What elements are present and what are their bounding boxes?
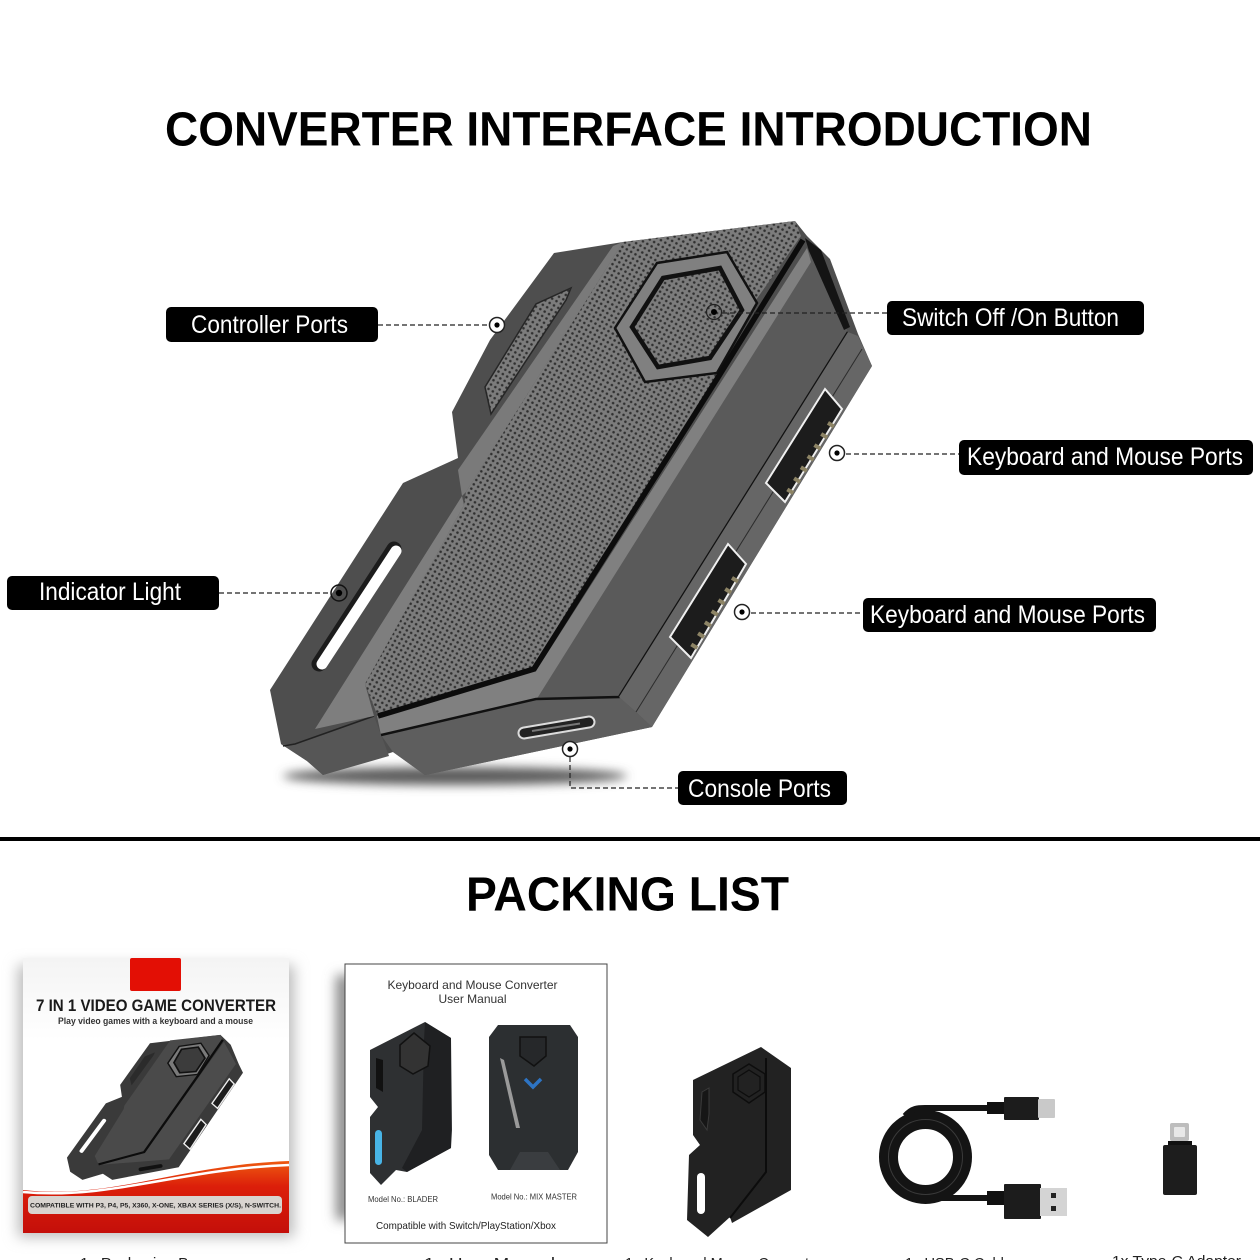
callout: console ports: Console Ports <box>688 775 831 803</box>
callout: keyboard and mouse ports lower <box>734 598 1156 632</box>
device ground shadow <box>283 767 627 785</box>
tab lower facet <box>281 716 389 775</box>
item: type-c adapter <box>1163 1123 1197 1195</box>
usb-a plug <box>987 1184 1067 1219</box>
manual page <box>345 964 607 1243</box>
callout: keyboard and mouse ports upper <box>830 440 1253 475</box>
box title: 7 IN 1 VIDEO GAME CONVERTER <box>36 997 276 1015</box>
model labels: Model No.: BLADER <box>368 1195 438 1204</box>
manual shadow <box>336 975 352 1220</box>
cable coil <box>888 1120 962 1194</box>
callout: indicator light: Indicator Light <box>39 578 181 606</box>
item: keyboard and mouse converter <box>687 1047 791 1237</box>
manual title: Keyboard and Mouse Converter <box>387 978 558 992</box>
callout: indicator light <box>7 576 347 610</box>
tab light band <box>315 496 464 729</box>
usb-c plug <box>987 1097 1055 1120</box>
callout: keyboard and mouse ports lower: Keyboard and Mouse Ports <box>870 601 1145 629</box>
indicator light slot <box>319 549 396 664</box>
box front <box>23 958 289 1233</box>
box shadow <box>18 965 294 1237</box>
compatibility note: Compatible with Switch/PlayStation/Xbox <box>376 1220 557 1232</box>
box subtitle: Play video games with a keyboard and a mouse <box>58 1016 253 1027</box>
callout: console ports <box>562 742 847 805</box>
compatibility strip: COMPATIBLE WITH P3, P4, P5, X360, X-ONE, XBAX SERIES (X/S), N-SWITCH. <box>30 1202 281 1210</box>
box red wave <box>23 1161 289 1233</box>
callout: controller ports <box>166 307 504 342</box>
callout: switch button: Switch Off /On Button <box>902 304 1119 332</box>
device rear body <box>270 221 872 775</box>
right side rim <box>619 332 872 727</box>
box device image <box>67 1035 243 1180</box>
black rear edge <box>805 238 850 330</box>
captions <box>80 1253 1241 1260</box>
usb port upper <box>766 389 842 502</box>
power button hexagon <box>615 252 757 382</box>
item: user manual: Model No.: MIX MASTER <box>491 1192 577 1202</box>
front face <box>377 248 848 735</box>
console usb-c port <box>524 722 589 733</box>
front lower facet <box>381 697 652 775</box>
upper light band <box>458 242 623 496</box>
dotted top panel <box>365 221 801 714</box>
item: usb-c cable <box>888 1097 1067 1219</box>
item: user manual: User Manual <box>438 992 507 1006</box>
item: user manual <box>336 964 607 1243</box>
item: packaging box <box>18 958 294 1237</box>
blader device <box>370 1022 452 1185</box>
heading: packing list: PACKING LIST <box>466 868 789 922</box>
callout: switch button <box>706 301 1144 335</box>
black seam <box>378 240 803 716</box>
product diagram: converter device <box>270 221 872 785</box>
front face light band <box>377 248 811 735</box>
controller port recess <box>485 288 571 414</box>
title: converter interface introduction: CONVERTER INTERFACE INTRODUCTION <box>165 102 1092 156</box>
mix master device <box>489 1025 578 1170</box>
compatibility strip <box>28 1196 282 1214</box>
callout: controller ports: Controller Ports <box>191 311 348 339</box>
usb port lower <box>670 544 746 658</box>
red tab <box>130 958 181 991</box>
